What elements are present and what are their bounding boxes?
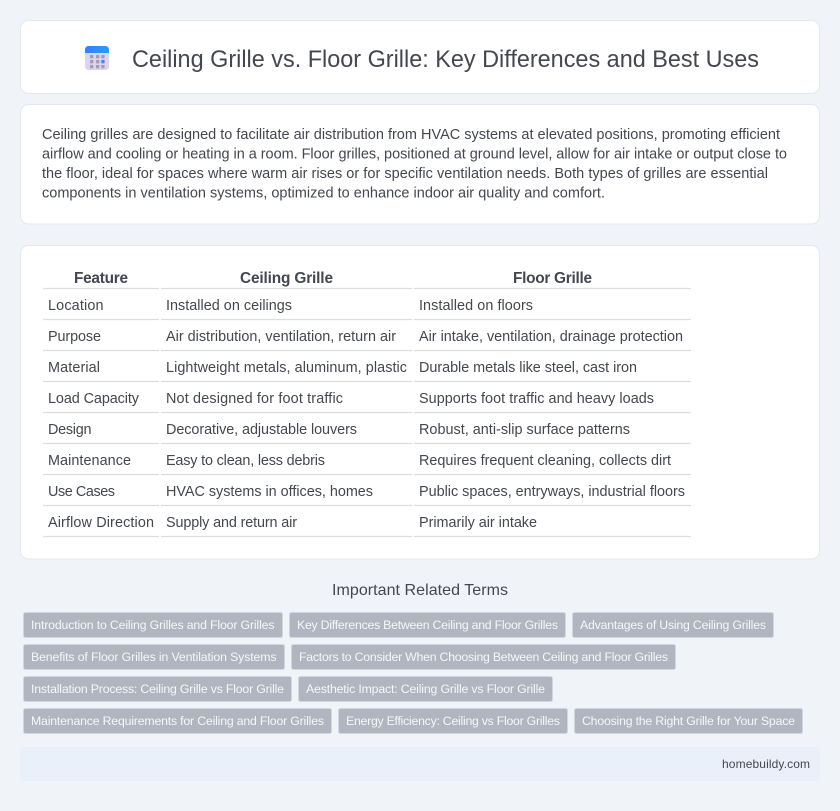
row: maintenance: Easy to clean, less debris xyxy=(166,453,325,469)
tag: Installation Process: Ceiling Grille vs Floor Grille xyxy=(31,682,284,696)
tag: Aesthetic Impact: Ceiling Grille vs Floor Grille xyxy=(306,682,545,696)
row: purpose: Air intake, ventilation, drainage protection xyxy=(419,329,683,345)
row: load capacity: Not designed for foot traffic xyxy=(166,391,343,407)
panel: introduction xyxy=(20,104,820,224)
row: design: Design xyxy=(48,422,92,438)
row: use cases xyxy=(48,484,685,500)
intro paragraph xyxy=(42,127,787,201)
row: material: Material xyxy=(48,360,100,376)
tag: Maintenance Requirements for Ceiling and Floor Grilles xyxy=(31,714,324,728)
row: use cases: Public spaces, entryways, industrial floors xyxy=(419,484,685,500)
tag: Advantages of Using Ceiling Grilles xyxy=(580,618,766,632)
row: airflow direction: Primarily air intake xyxy=(419,515,537,531)
tags: related terms xyxy=(24,612,802,734)
heading: important related terms: Important Related Terms xyxy=(332,582,508,599)
row: load capacity: Load Capacity xyxy=(48,391,140,407)
tag: Key Differences Between Ceiling and Floor Grilles xyxy=(297,618,558,632)
tag xyxy=(24,708,332,734)
intro paragraph: Ceiling grilles are designed to facilitate air distribution from HVAC systems at elevated positions, promoting efficient xyxy=(42,127,780,143)
tag: Energy Efficiency: Ceiling vs Floor Grilles xyxy=(346,714,560,728)
row: airflow direction: Supply and return air xyxy=(166,515,297,531)
tag xyxy=(572,612,774,638)
panel: comparison table xyxy=(20,246,820,559)
row: design: Decorative, adjustable louvers xyxy=(166,422,357,438)
row: material xyxy=(48,360,637,376)
row: location: Installed on floors xyxy=(419,298,533,314)
intro paragraph: the floor, ideal for spaces where warm air rises or for specific ventilation needs. Both types of grilles are essential xyxy=(42,166,768,182)
table header: Floor Grille xyxy=(513,270,592,287)
row: purpose: Purpose xyxy=(48,329,101,345)
intro paragraph: airflow and cooling or heating in a room. Floor grilles, positioned at ground level, allow for air intake or output close to xyxy=(42,146,787,162)
row: purpose xyxy=(48,329,683,345)
panel: header xyxy=(20,20,820,94)
tag xyxy=(298,676,552,702)
tag xyxy=(24,612,282,638)
tag xyxy=(290,612,566,638)
icon: calendar grid xyxy=(85,46,109,70)
table header xyxy=(74,270,592,287)
table header: Ceiling Grille xyxy=(240,270,333,287)
row: use cases: Use Cases xyxy=(48,484,115,500)
tag xyxy=(338,708,568,734)
tag: Introduction to Ceiling Grilles and Floor Grilles xyxy=(31,618,274,632)
intro paragraph: components in ventilation systems, optimized to enhance indoor air quality and comfort. xyxy=(42,185,605,201)
tag: Choosing the Right Grille for Your Space xyxy=(582,714,795,728)
tag xyxy=(24,676,292,702)
row: design xyxy=(48,422,630,438)
row: material: Durable metals like steel, cast iron xyxy=(419,360,637,376)
row: use cases: HVAC systems in offices, homes xyxy=(166,484,373,500)
tag xyxy=(292,644,676,670)
title: Ceiling Grille vs. Floor Grille: Key Differences and Best Uses xyxy=(132,46,759,73)
tag: Factors to Consider When Choosing Between Ceiling and Floor Grilles xyxy=(299,650,668,664)
row: maintenance: Requires frequent cleaning, collects dirt xyxy=(419,453,671,469)
row: location: Installed on ceilings xyxy=(166,298,292,314)
row: load capacity xyxy=(48,391,654,407)
row: design: Robust, anti-slip surface patterns xyxy=(419,422,630,438)
tag xyxy=(24,644,284,670)
tag xyxy=(574,708,802,734)
row: airflow direction: Airflow Direction xyxy=(48,515,154,531)
row: location xyxy=(48,298,533,314)
footer xyxy=(20,747,820,781)
row: material: Lightweight metals, aluminum, plastic xyxy=(166,360,407,376)
row: location: Location xyxy=(48,298,104,314)
tag: Benefits of Floor Grilles in Ventilation Systems xyxy=(31,650,276,664)
row: purpose: Air distribution, ventilation, return air xyxy=(166,329,396,345)
row: maintenance xyxy=(48,453,671,469)
footer source: homebuildy.com xyxy=(722,757,810,771)
row: maintenance: Maintenance xyxy=(48,453,131,469)
row: load capacity: Supports foot traffic and heavy loads xyxy=(419,391,654,407)
row: airflow direction xyxy=(48,515,537,531)
table header: Feature xyxy=(74,270,128,287)
